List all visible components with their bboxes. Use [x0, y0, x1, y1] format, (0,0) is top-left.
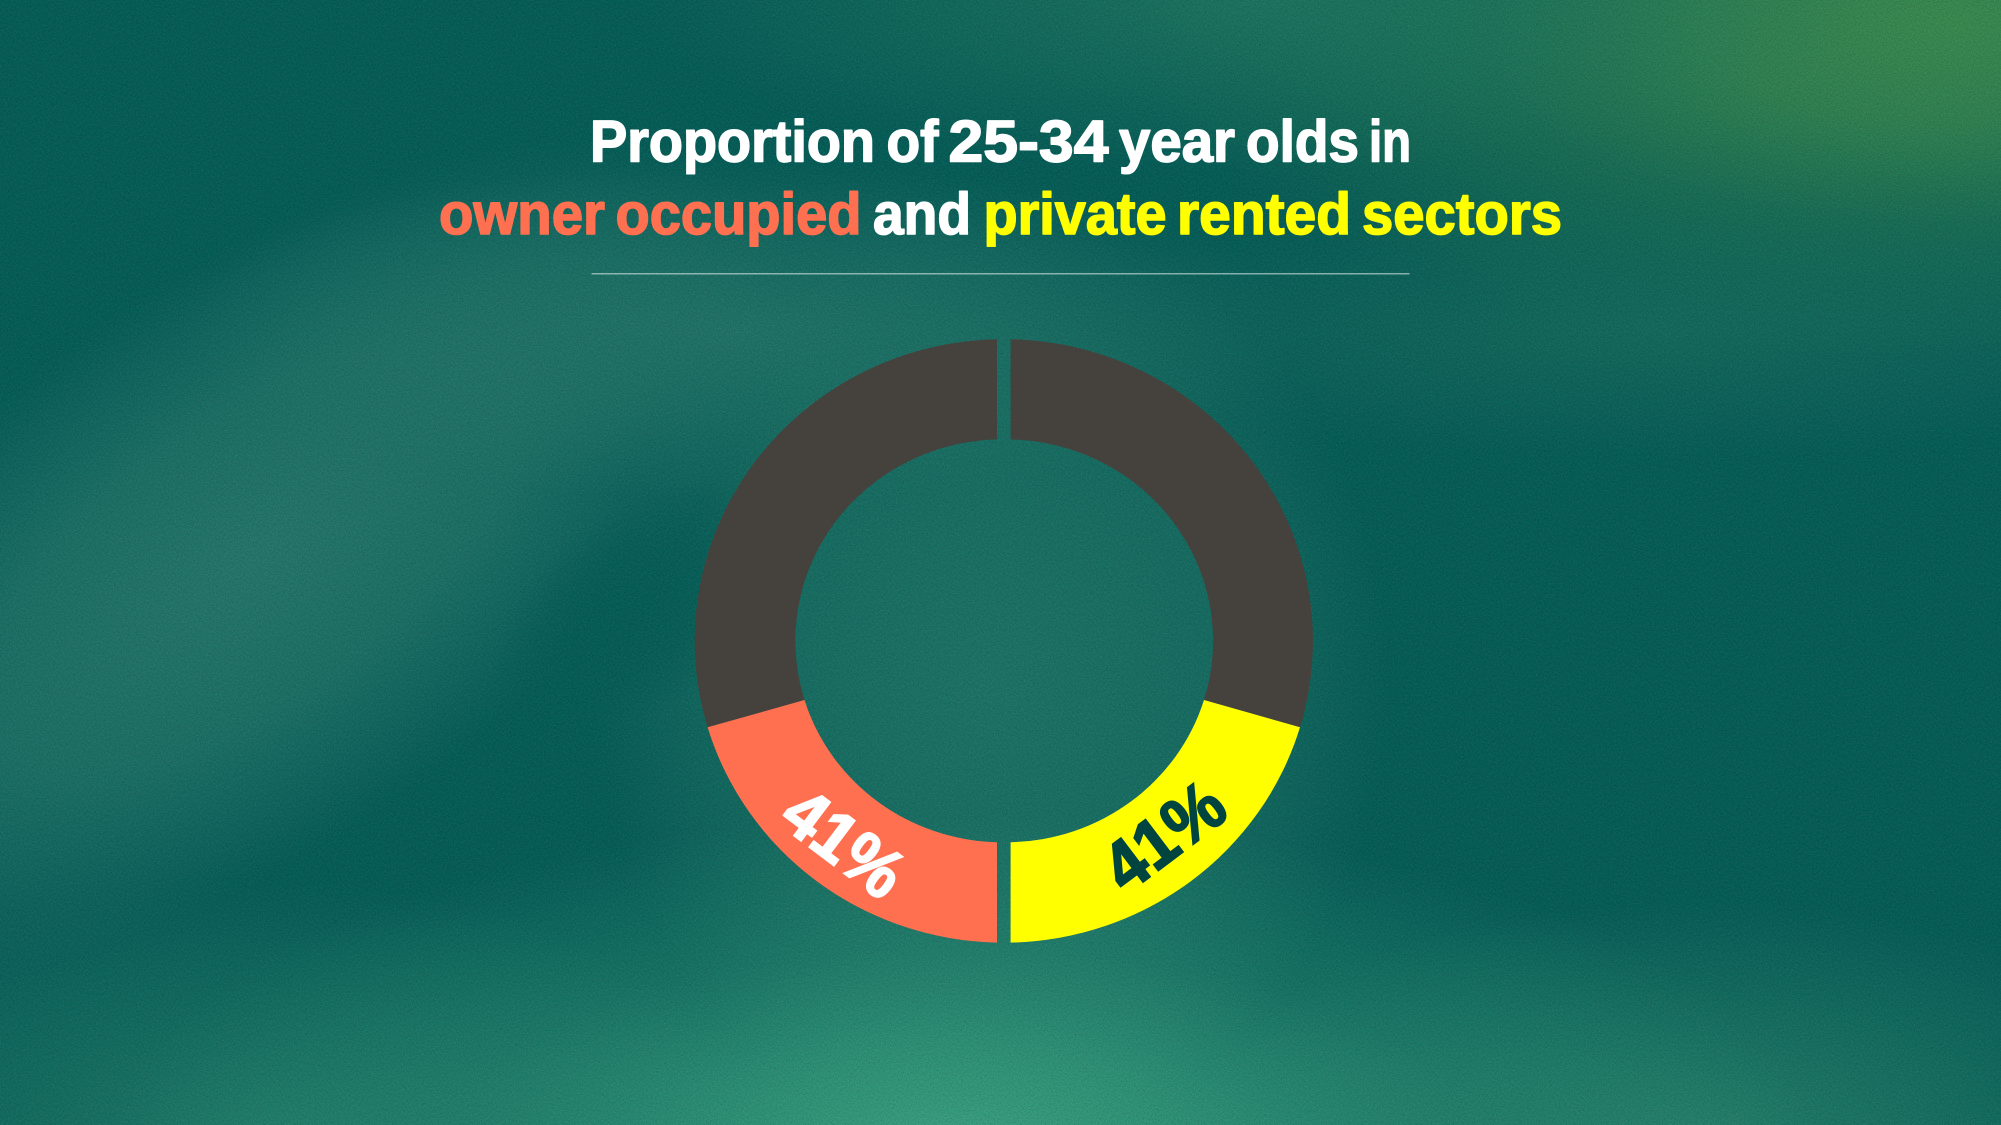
- title line 1: 25-34: [948, 108, 1109, 174]
- label: owner occupied 41%: 41%: [768, 772, 920, 914]
- title line 1: in: [1369, 108, 1411, 174]
- title line 2: owner occupied: occupied: [616, 181, 862, 247]
- label: private rented 41%: 41%: [1088, 765, 1240, 907]
- title line 2: private rented sectors: rented: [1177, 181, 1351, 247]
- title line 2: private rented sectors: [984, 181, 1562, 247]
- title line 2: owner occupied: [439, 181, 862, 247]
- title line 1: [590, 108, 1411, 174]
- segment: private rented 41%: [1011, 700, 1300, 943]
- donut chart: [695, 339, 1313, 943]
- title line 2: private rented sectors: sectors: [1362, 181, 1562, 247]
- title line 2: private rented sectors: private: [984, 181, 1166, 247]
- title line 1: of: [886, 108, 939, 174]
- segment: remaining share, upper right: [1011, 339, 1313, 727]
- title line 1: Proportion: [590, 108, 875, 174]
- segment: owner occupied 41%: [708, 700, 997, 943]
- title line 1: year: [1119, 108, 1235, 174]
- title line 2: and: and: [873, 181, 971, 247]
- segment: remaining share, upper left: [695, 339, 997, 727]
- title line 1: olds: [1246, 108, 1359, 174]
- title: [439, 108, 1562, 247]
- title line 2: owner occupied: owner: [439, 181, 605, 247]
